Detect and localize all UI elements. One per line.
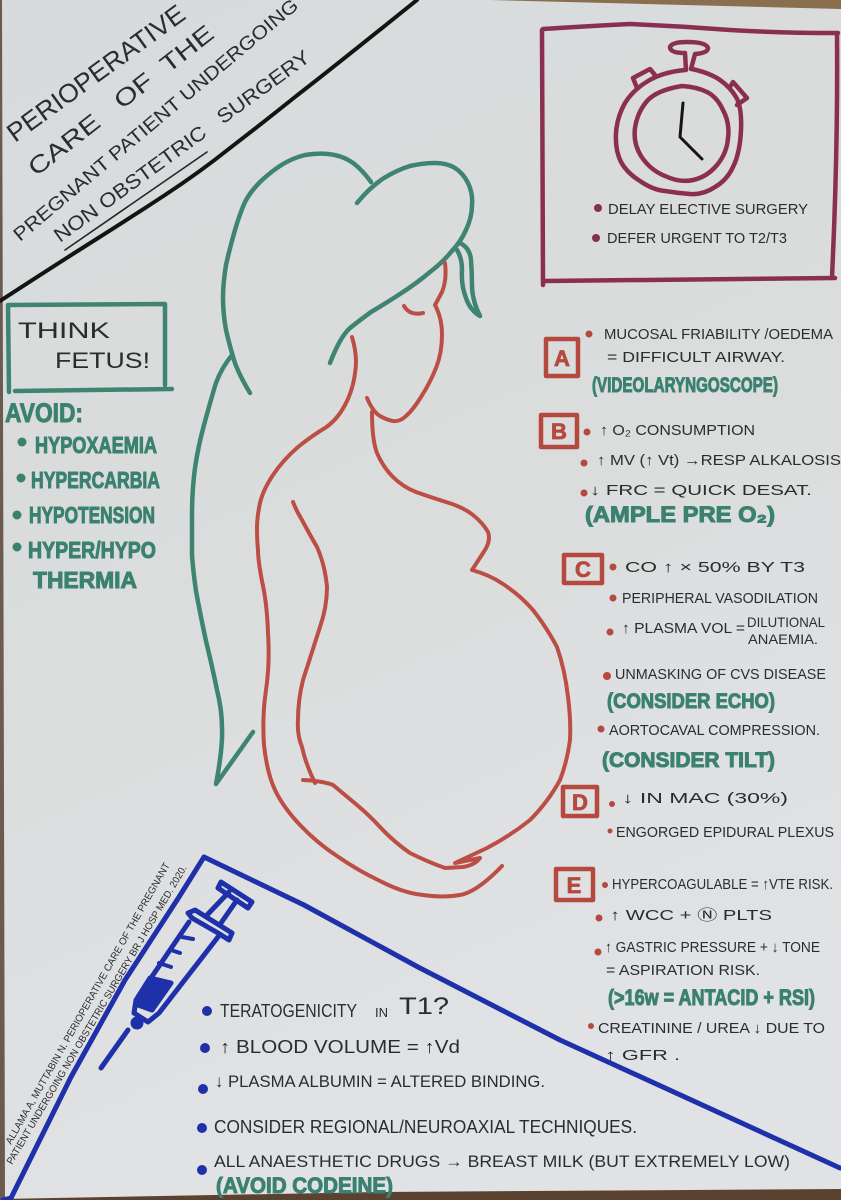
title line 2: CARE OF THE xyxy=(23,20,219,182)
bullet: teratogenicity: IN xyxy=(375,1005,388,1020)
hair outline, green xyxy=(192,154,480,784)
callout: avoid codeine: (AVOID CODEINE) xyxy=(216,1173,393,1198)
circulation notes: UNMASKING OF CVS DISEASE xyxy=(615,666,826,683)
item hypotension xyxy=(12,502,155,528)
panel: think fetus box xyxy=(8,304,172,392)
E notes: ↑ GASTRIC PRESSURE + ↓ TONE xyxy=(605,939,820,956)
section C: circulation xyxy=(564,555,826,772)
circulation notes: DILUTIONAL xyxy=(747,614,825,630)
panel: pregnant woman line drawing xyxy=(192,154,570,896)
item hyper/hypo thermia xyxy=(12,537,156,593)
bullet: teratogenicity: T1? xyxy=(399,993,449,1020)
breathing notes xyxy=(580,422,841,527)
section E: endocrine and other xyxy=(556,869,833,1064)
E notes: ↑ WCC + Ⓝ PLTS xyxy=(610,907,772,924)
circulation notes: PERIPHERAL VASODILATION xyxy=(622,590,818,607)
badge C: C xyxy=(575,557,591,582)
underline under obstetric xyxy=(65,152,207,250)
breathing notes: ↑ O₂ CONSUMPTION xyxy=(600,422,755,439)
citation: PATIENT UNDERGOING NON OBSTETRIC SURGERY BR J HOSP MED. 2020. xyxy=(5,864,190,1167)
badge A xyxy=(546,339,578,376)
item hypercarbia: HYPERCARBIA xyxy=(31,467,160,493)
item hypotension: HYPOTENSION xyxy=(29,502,155,528)
item hyper/hypo thermia: HYPER/HYPO xyxy=(28,537,156,563)
circulation notes: CO ↑ × 50% BY T3 xyxy=(625,559,805,576)
D notes xyxy=(608,790,834,841)
item hyper/hypo thermia: THERMIA xyxy=(33,567,137,593)
badge B xyxy=(541,415,577,447)
badge A: A xyxy=(554,346,570,371)
section A: airway xyxy=(546,326,833,397)
bullet: regional techniques: CONSIDER REGIONAL/NEUROAXIAL TECHNIQUES. xyxy=(214,1117,637,1137)
section D: drugs and neuraxis xyxy=(563,787,834,841)
blue triangle lines xyxy=(3,857,840,1200)
box frame xyxy=(8,304,172,392)
title panel: title text with black diagonal divider xyxy=(0,0,417,301)
diagonal divider line xyxy=(0,0,417,301)
bullet: plasma albumin: ↓ PLASMA ALBUMIN = ALTERED BINDING. xyxy=(215,1072,545,1091)
badge D: D xyxy=(572,790,588,815)
title line 1: PERIOPERATIVE xyxy=(1,0,191,148)
bullet: breast milk: ALL ANAESTHETIC DRUGS → BREAST MILK (BUT EXTREMELY LOW) xyxy=(214,1152,790,1171)
breathing notes: (AMPLE PRE O₂) xyxy=(585,502,775,527)
airway notes: MUCOSAL FRIABILITY /OEDEMA xyxy=(604,326,833,343)
section B: breathing xyxy=(541,415,841,527)
bullet: teratogenicity: TERATOGENICITY xyxy=(220,1001,357,1021)
E notes: CREATININE / UREA ↓ DUE TO xyxy=(598,1020,825,1037)
badge E xyxy=(556,869,593,900)
circulation notes xyxy=(598,559,826,772)
icon: stopwatch xyxy=(616,42,747,194)
breathing notes: ↑ MV (↑ Vt) →RESP ALKALOSIS xyxy=(597,452,841,469)
badge B: B xyxy=(551,419,567,444)
badge E: E xyxy=(567,873,581,898)
citation: ALLAMA A, MUTTABIN N. PERIOPERATIVE CARE OF THE PREGNANT xyxy=(4,861,173,1146)
circulation notes: AORTOCAVAL COMPRESSION. xyxy=(609,722,820,739)
circulation notes: (CONSIDER ECHO) xyxy=(607,690,775,713)
box heading line 2: FETUS! xyxy=(55,348,150,373)
badge D xyxy=(563,787,597,816)
circulation notes: (CONSIDER TILT) xyxy=(602,749,775,772)
title line 3: PREGNANT PATIENT UNDERGOING xyxy=(10,0,303,246)
title line 4: NON OBSTETRIC SURGERY xyxy=(50,46,315,247)
list: avoid xyxy=(5,398,160,593)
panel frame xyxy=(542,24,838,285)
E notes xyxy=(588,876,833,1064)
breathing notes: ↓ FRC = QUICK DESAT. xyxy=(590,482,812,499)
airway notes: = DIFFICULT AIRWAY. xyxy=(607,349,785,366)
bullet: defer urgent: DEFER URGENT TO T2/T3 xyxy=(607,230,787,247)
bullet: delay elective surgery: DELAY ELECTIVE SURGERY xyxy=(608,201,808,218)
E notes: ↑ GFR . xyxy=(605,1047,680,1064)
badge C xyxy=(564,555,602,583)
icon: syringe xyxy=(101,882,252,1068)
circulation notes: ANAEMIA. xyxy=(748,631,818,647)
panel: anaesthetic drugs triangle xyxy=(3,857,840,1200)
D notes: ↓ IN MAC (30%) xyxy=(622,790,788,807)
E notes: = ASPIRATION RISK. xyxy=(606,962,760,979)
item hypoxaemia: HYPOXAEMIA xyxy=(35,432,157,458)
bullet: blood volume: ↑ BLOOD VOLUME = ↑Vd xyxy=(220,1037,460,1057)
avoid heading: AVOID: xyxy=(5,398,83,428)
D notes: ENGORGED EPIDURAL PLEXUS xyxy=(616,824,834,841)
airway notes xyxy=(586,326,833,397)
box heading line 1: THINK xyxy=(18,318,110,343)
circulation notes: ↑ PLASMA VOL = xyxy=(622,620,745,637)
panel: timing of surgery with stopwatch xyxy=(542,24,838,285)
body outline, red xyxy=(257,263,570,896)
bullet: teratogenicity xyxy=(202,993,449,1021)
